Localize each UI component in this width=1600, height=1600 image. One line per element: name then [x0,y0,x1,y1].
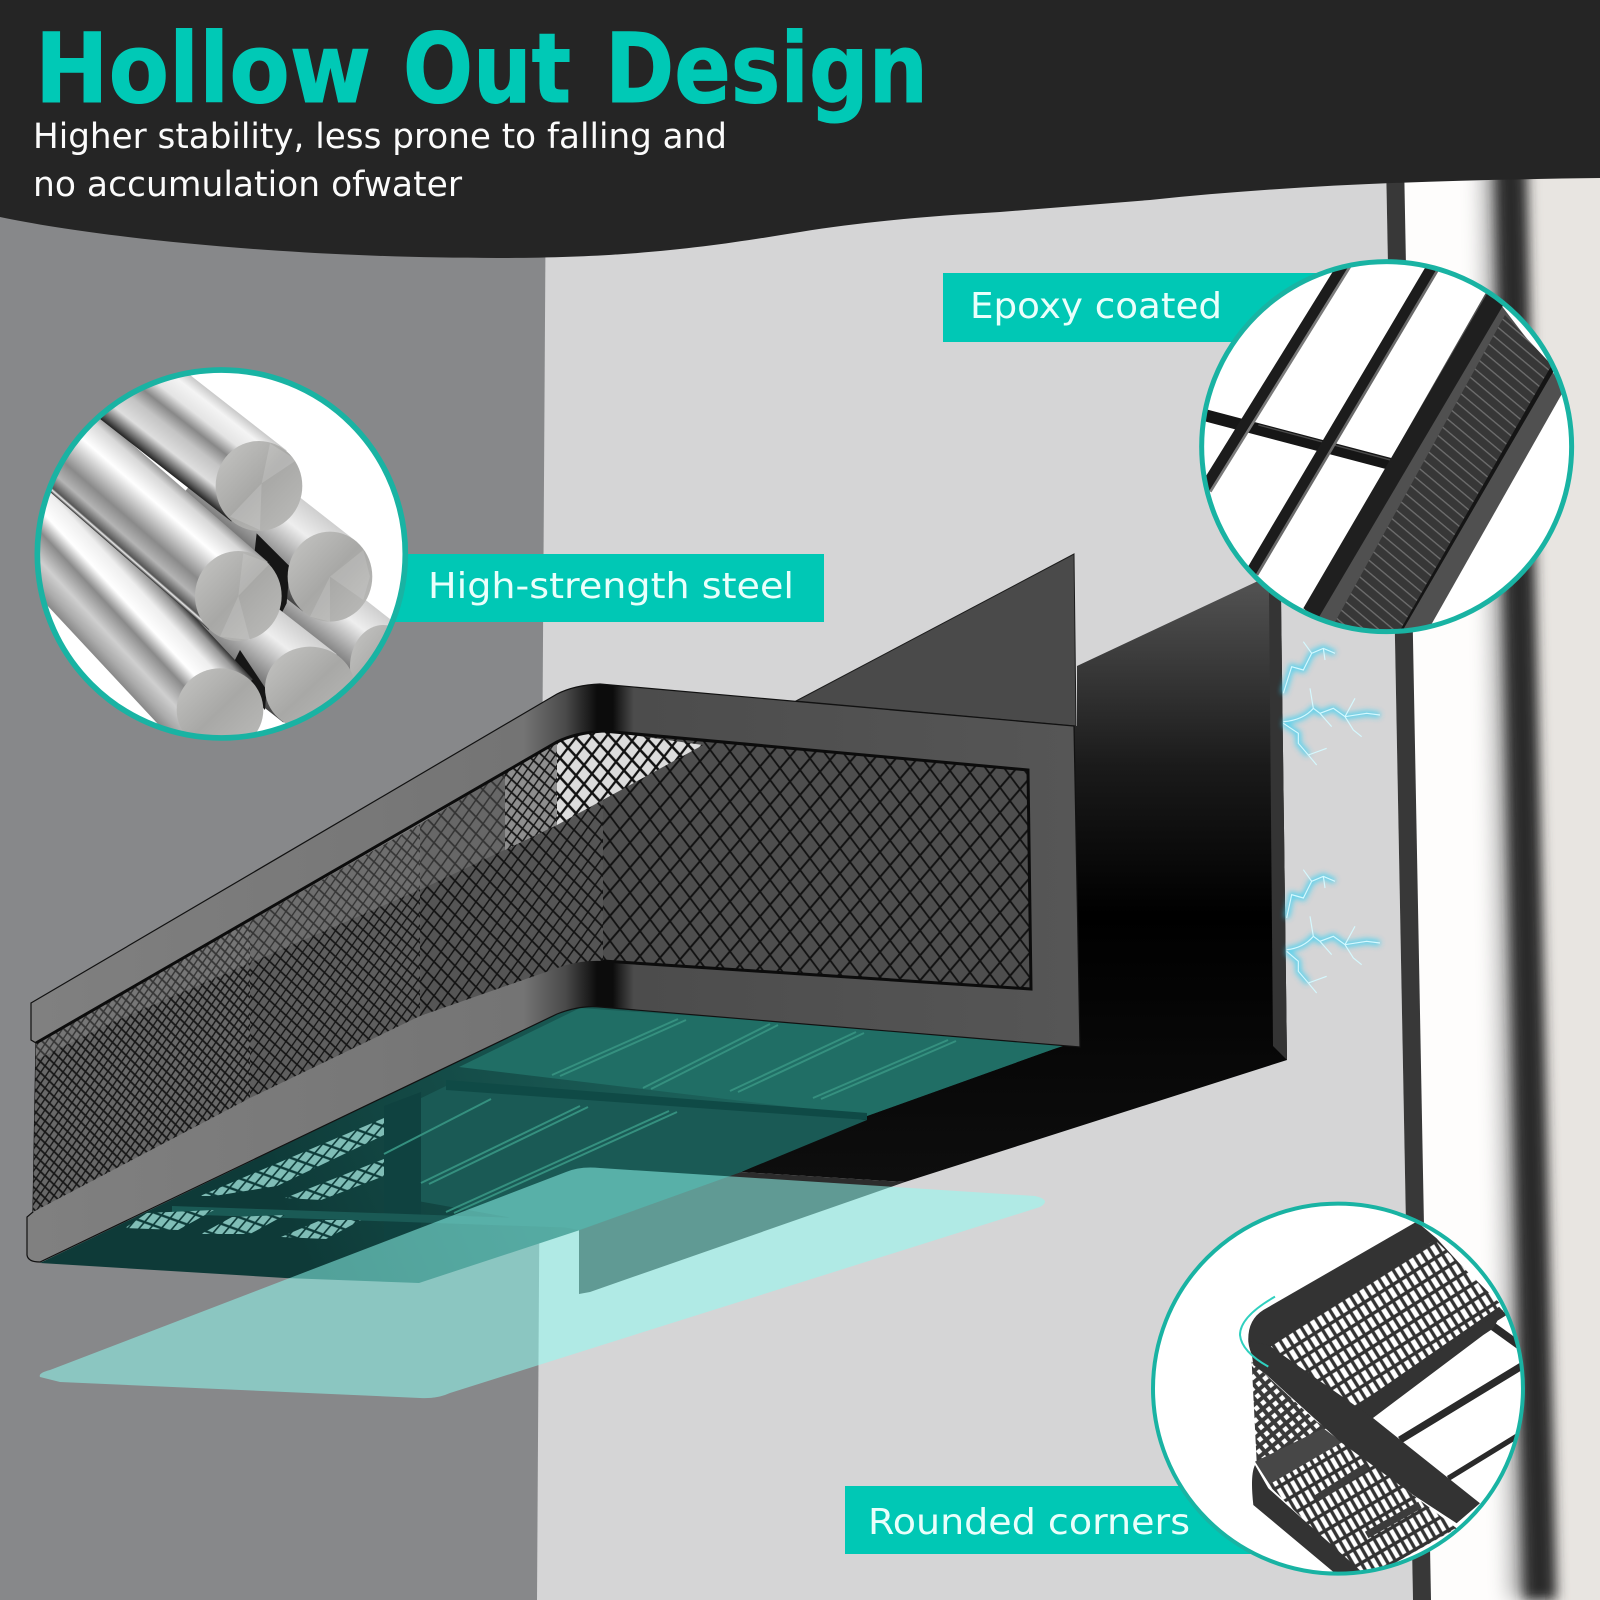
label: Epoxy coated: Epoxy coated [970,286,1222,327]
title [35,13,928,125]
translucent teal light sheet [40,1168,1045,1398]
label: Rounded corners [845,1486,1260,1554]
subtitle [33,117,727,205]
back triangular plate [796,554,1076,726]
label: Epoxy coated [943,273,1343,342]
product: magnetic shelf basket [27,554,1287,1294]
long front rail [1250,1342,1480,1523]
icon: magnetic lightning lower [1287,870,1380,993]
icon: teal corner highlight arc [1240,1297,1275,1367]
teal lit basket floor [40,1000,1075,1283]
background: refrigerator side with door edge [1386,160,1600,1600]
circle: epoxy coated frame close-up [1202,262,1572,642]
subtitle: Higher stability, less prone to falling and [33,117,727,157]
label: High-strength steel [380,554,824,622]
label: High-strength steel: High-strength steel [428,566,794,607]
title: Hollow [35,13,371,125]
door strip seen through [1400,1327,1523,1478]
label: Rounded corners: Rounded corners [868,1502,1190,1543]
subtitle: no accumulation ofwater [33,165,463,205]
callout: High-strength steel [34,367,824,741]
left mesh [1252,1362,1327,1462]
basket frame rails [27,684,1080,1262]
side mesh wall [33,731,703,1212]
circle: steel rods [34,367,408,741]
black magnetic back plate [741,581,1287,1182]
header band [0,0,1600,258]
front mesh panel [603,731,1031,989]
title: Design [605,13,928,125]
bottom mesh [1268,1442,1457,1575]
icon: magnetic lightning upper [1283,642,1380,765]
circle: rounded corner close-up [1153,1204,1523,1575]
callout: Rounded corners [845,1204,1523,1575]
lower plate edge under translucent sheet [579,1172,905,1294]
top rail and inner flat [1248,1222,1507,1408]
title: Out [403,13,571,125]
callout: Epoxy coated [943,262,1572,642]
